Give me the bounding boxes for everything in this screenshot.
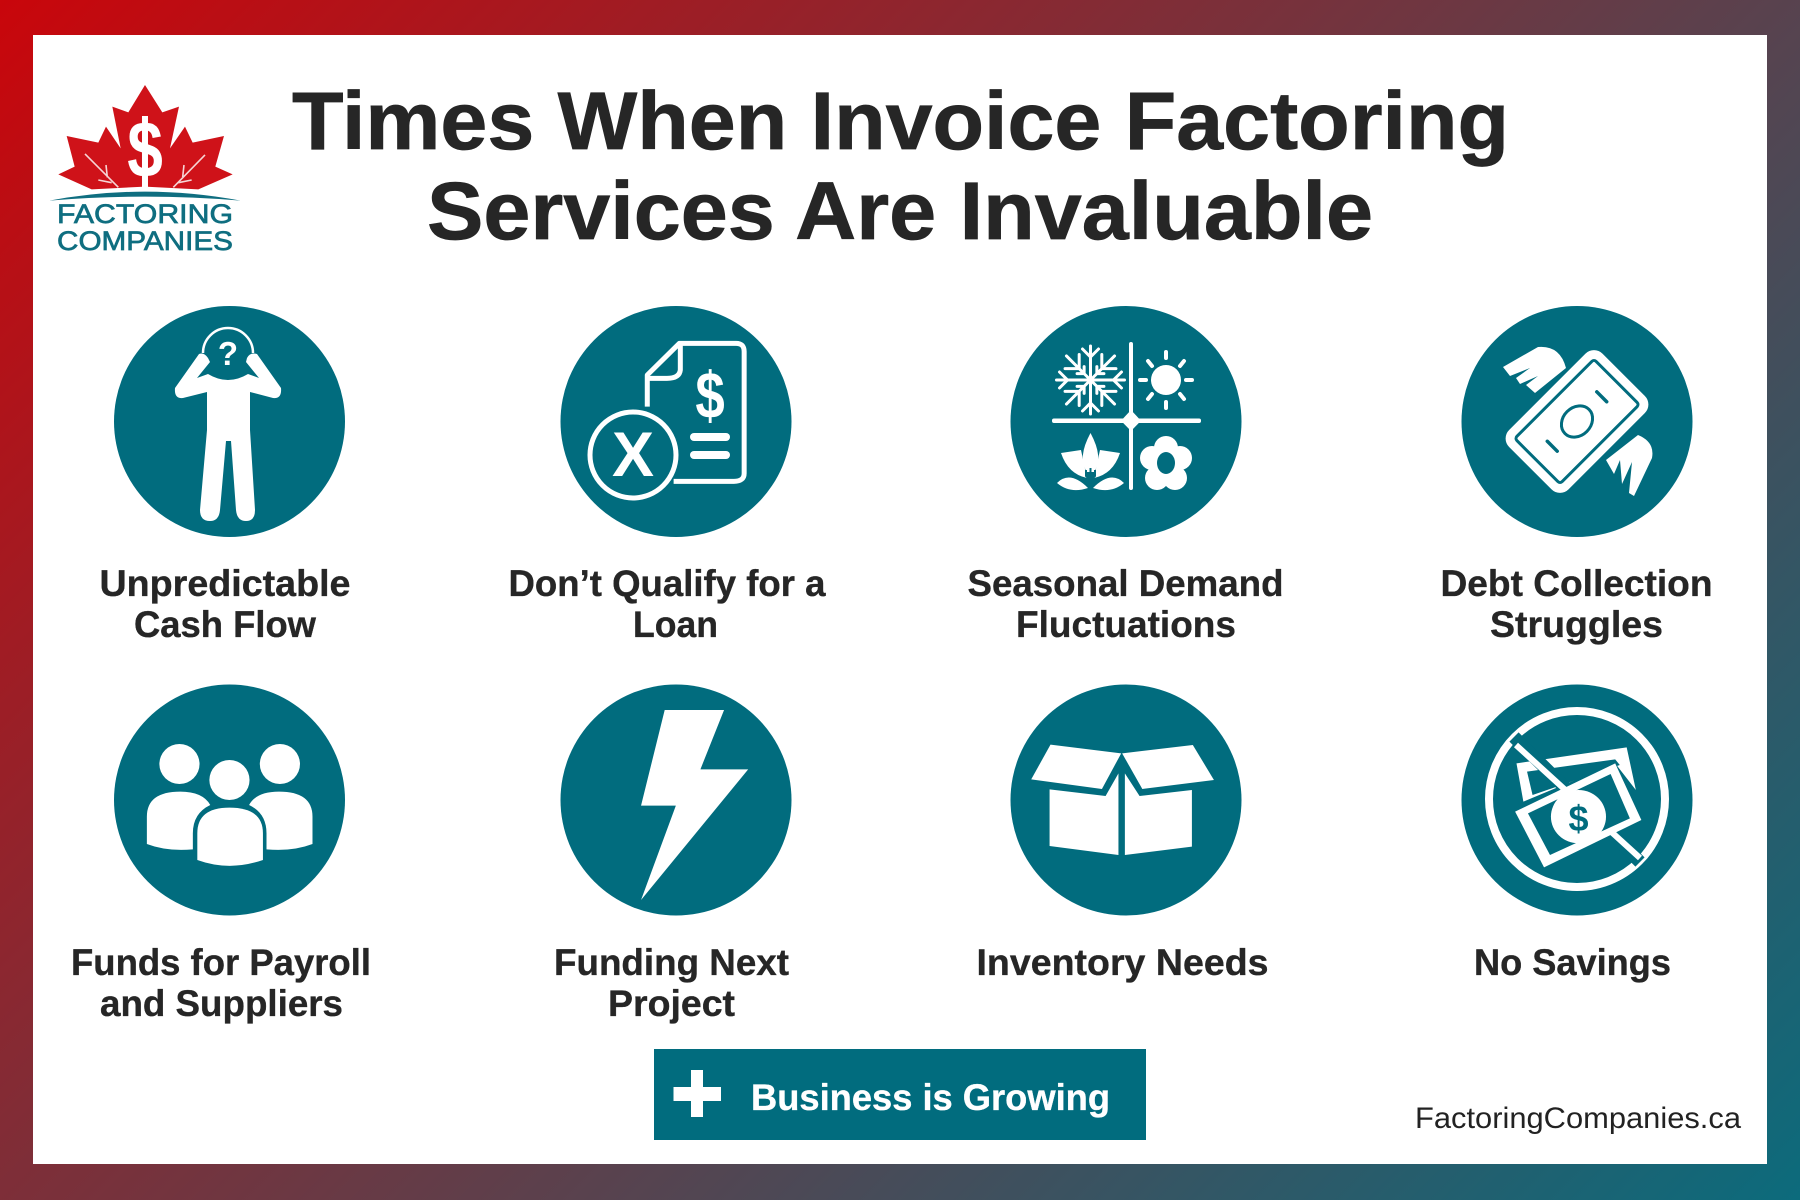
title: Times When Invoice Factoring [292, 76, 1509, 167]
logo: Factoring Companies: COMPANIES [57, 226, 233, 256]
icon: rejected invoice: $ [695, 358, 725, 432]
item: Seasonal Demand Fluctuations: Fluctuations [1016, 604, 1236, 645]
item: Funding Next Project: Funding Next [554, 942, 789, 983]
item: Funding Next Project: Project [608, 983, 735, 1024]
item: Inventory Needs: Inventory Needs [976, 942, 1268, 983]
icon: group of people [114, 684, 345, 916]
item: Funds for Payroll and Suppliers [71, 684, 371, 1024]
item: Funding Next Project [554, 684, 792, 1024]
item: Seasonal Demand Fluctuations [968, 306, 1284, 645]
icon: four seasons [1010, 306, 1242, 537]
item: Don't Qualify for a Loan [508, 306, 826, 645]
icon: rejected invoice [560, 306, 792, 537]
item: Debt Collection Struggles: Struggles [1490, 604, 1663, 645]
item: No Savings [1462, 684, 1692, 983]
item: Don't Qualify for a Loan: Loan [633, 604, 718, 645]
icon: plus [674, 1070, 721, 1117]
icon: lightning bolt [560, 684, 792, 916]
icon: money with wings [1462, 306, 1692, 537]
title [292, 76, 1509, 257]
website footer: FactoringCompanies.ca [1415, 1102, 1741, 1135]
item: Unpredictable Cash Flow [100, 306, 350, 645]
icon: open box [1010, 684, 1242, 916]
callout: Business is Growing [654, 1049, 1146, 1140]
item: Funds for Payroll and Suppliers: Funds for Payroll [71, 942, 371, 983]
logo wordmark: FACTORING [57, 199, 233, 229]
item: Unpredictable Cash Flow: Unpredictable [100, 563, 350, 604]
item: Inventory Needs [976, 684, 1268, 983]
logo swoosh [49, 192, 241, 201]
item: Debt Collection Struggles [1440, 306, 1712, 645]
item: No Savings: No Savings [1474, 942, 1671, 983]
icon: confused person [114, 306, 345, 537]
icon: dollar sign in leaf: $ [127, 105, 163, 195]
icon: no money: $ [1568, 798, 1589, 839]
item: Funds for Payroll and Suppliers: and Suppliers [100, 983, 343, 1024]
icon: no money [1462, 684, 1692, 916]
callout: Business is Growing: Business is Growing [751, 1077, 1110, 1118]
item: Don't Qualify for a Loan: Don’t Qualify for a [508, 563, 826, 604]
icon: maple leaf [58, 85, 233, 189]
item: Debt Collection Struggles: Debt Collection [1440, 563, 1712, 604]
title: Services Are Invaluable [427, 166, 1373, 257]
icon: confused person: ? [218, 335, 238, 372]
logo: Factoring Companies [49, 85, 241, 256]
icon: rejected invoice: X [612, 420, 654, 490]
item: Seasonal Demand Fluctuations: Seasonal Demand [968, 563, 1284, 604]
item: Unpredictable Cash Flow: Cash Flow [134, 604, 316, 645]
